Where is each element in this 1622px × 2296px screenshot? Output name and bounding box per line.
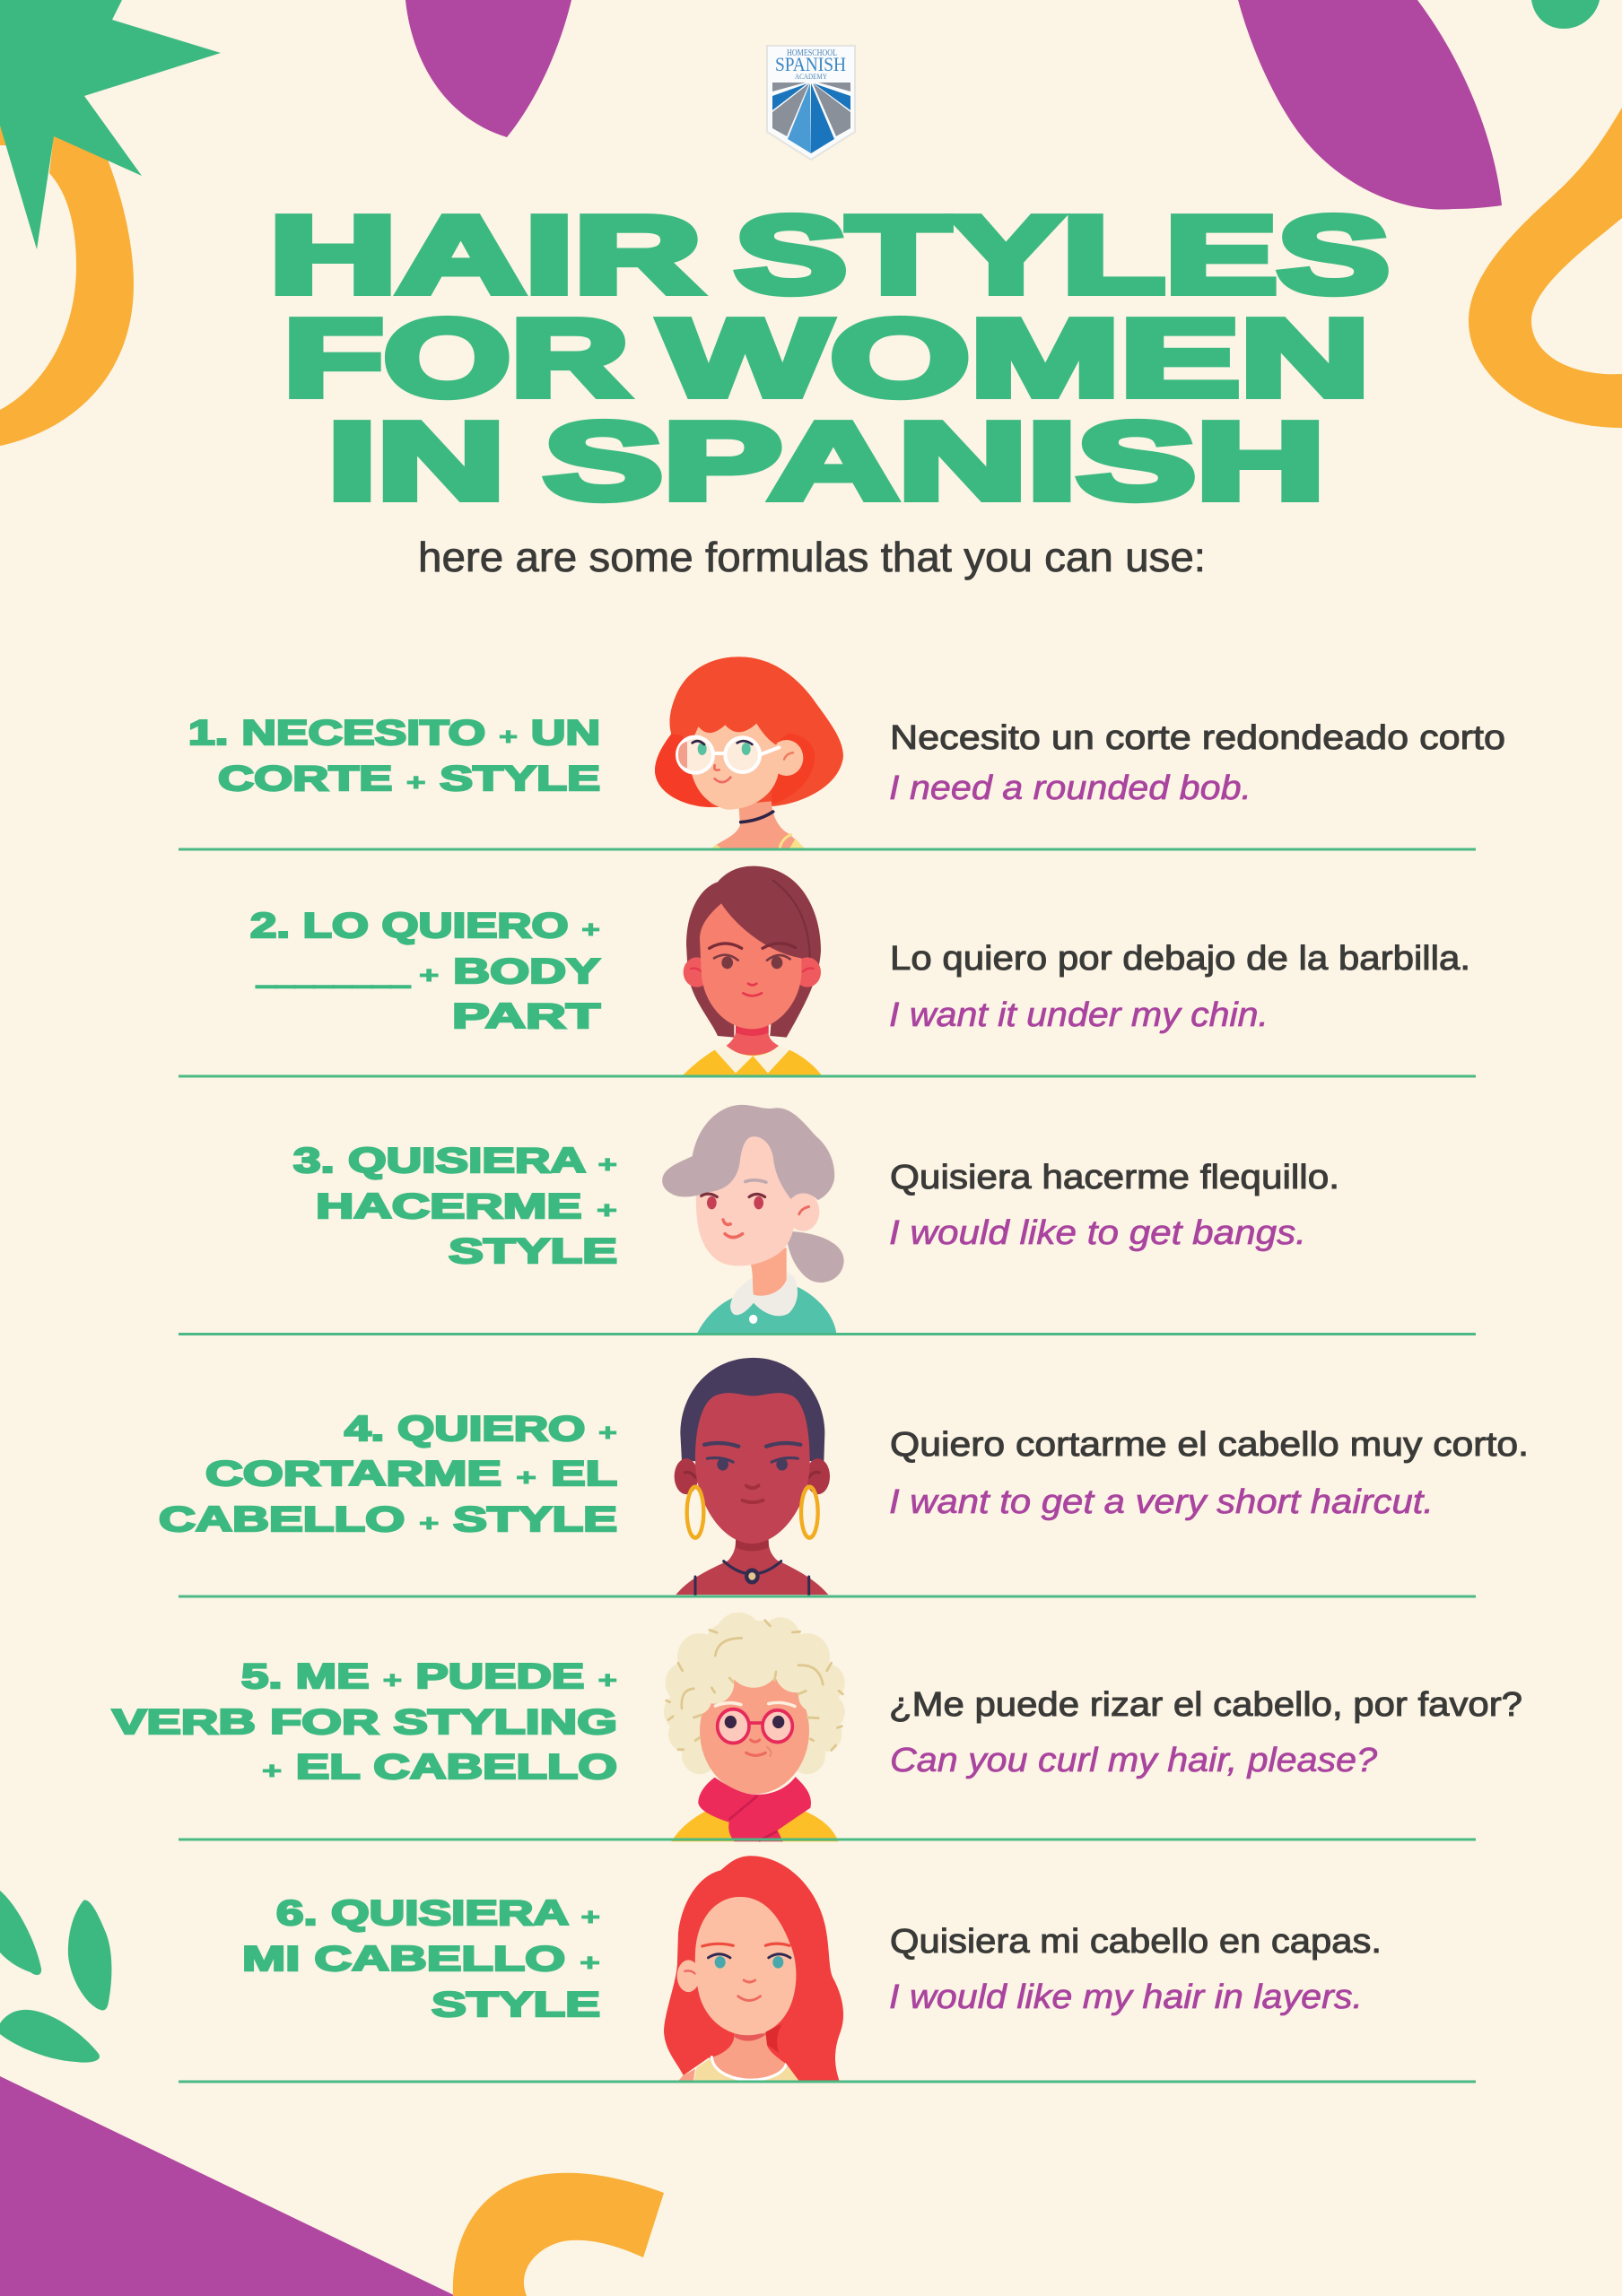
row 2 Spanish sentence and translation: I want it under my chin. — [889, 996, 1269, 1034]
row 3 Spanish sentence and translation — [889, 1159, 1339, 1252]
row 5 Spanish sentence and translation: ¿Me puede rizar el cabello, por favor? — [889, 1686, 1522, 1724]
row 1 Spanish sentence and translation: I need a rounded bob. — [889, 770, 1251, 807]
row 3 portrait: grey hair with low bun — [662, 1105, 844, 1334]
title: IN — [327, 400, 505, 522]
decor: purple leaf top centre — [406, 0, 571, 137]
logo: Homeschool Spanish Academy shield: ACADEMY — [795, 73, 827, 81]
row 3 Spanish sentence and translation: I would like to get bangs. — [889, 1214, 1306, 1252]
row 5 formula: 5. ME + PUEDE + — [241, 1657, 617, 1696]
row 2 Spanish sentence and translation: Lo quiero por debajo de la barbilla. — [890, 940, 1470, 978]
row 6 Spanish sentence and translation: Quisiera mi cabello en capas. — [890, 1923, 1382, 1961]
row 3 formula: 3. QUISIERA + — [293, 1142, 617, 1180]
title: WOMEN — [660, 297, 1370, 419]
row 4 formula: CORTARME + EL — [205, 1455, 617, 1493]
row 6 formula: 6. QUISIERA + — [276, 1894, 600, 1933]
row 5 portrait: curly blonde hair, red glasses and scarf — [664, 1613, 845, 1841]
decor: orange ring top left — [0, 126, 134, 446]
row 2 Spanish sentence and translation — [889, 940, 1470, 1034]
row 2 formula: 2. LO QUIERO + — [250, 907, 600, 945]
row 3 Spanish sentence and translation: Quisiera hacerme flequillo. — [890, 1159, 1339, 1196]
row 2 formula: + BODY — [419, 952, 600, 991]
decor: purple triangle bottom left — [0, 2076, 456, 2296]
logo: Homeschool Spanish Academy shield — [767, 46, 855, 160]
row 3 formula: STYLE — [449, 1232, 617, 1271]
row 1 formula: CORTE + STYLE — [218, 760, 600, 798]
row 4 formula — [159, 1410, 617, 1539]
row 1 Spanish sentence and translation — [889, 719, 1505, 807]
row 5 formula: + EL CABELLO — [262, 1748, 617, 1787]
row 4 Spanish sentence and translation: I want to get a very short haircut. — [889, 1483, 1434, 1521]
row 6 Spanish sentence and translation: I would like my hair in layers. — [889, 1979, 1363, 2016]
title — [269, 194, 1390, 522]
row 6 Spanish sentence and translation — [889, 1923, 1382, 2016]
row 6 formula: STYLE — [432, 1986, 600, 2024]
row 4 formula: 4. QUIERO + — [344, 1410, 617, 1448]
row 4 portrait: short dark hair with hoop earrings — [675, 1358, 830, 1595]
row 4 Spanish sentence and translation — [889, 1426, 1529, 1521]
decor: purple leaf top right — [1238, 0, 1502, 209]
row 5 formula: VERB FOR STYLING — [112, 1703, 617, 1742]
row 1 formula: 1. NECESITO + UN — [188, 714, 600, 752]
decor: green star top left — [0, 0, 221, 249]
decor: orange arc bottom — [453, 2173, 664, 2296]
row 2 formula: PART — [452, 997, 601, 1036]
row 5 formula — [112, 1657, 617, 1787]
row 1 formula — [188, 714, 600, 798]
row 2 formula — [250, 907, 601, 1036]
row 3 formula: HACERME + — [316, 1187, 617, 1226]
row 6 portrait: long wavy red hair — [664, 1856, 843, 2082]
subtitle: here are some formulas that you can use: — [418, 534, 1206, 580]
decor: green leaves bottom left — [0, 1891, 111, 2063]
row 2 portrait: auburn side-swept hair — [682, 866, 823, 1076]
row 1 Spanish sentence and translation: Necesito un corte redondeado corto — [890, 719, 1505, 757]
title: SPANISH — [544, 400, 1325, 522]
logo: Homeschool Spanish Academy shield: HOMESCHOOL — [787, 48, 837, 58]
row 5 Spanish sentence and translation: Can you curl my hair, please? — [890, 1742, 1378, 1779]
row 6 formula — [242, 1894, 600, 2024]
row 4 Spanish sentence and translation: Quiero cortarme el cabello muy corto. — [890, 1426, 1529, 1464]
title: FOR — [283, 297, 629, 419]
row 2 formula: ________ — [256, 952, 411, 991]
logo: Homeschool Spanish Academy shield: SPANISH — [775, 53, 846, 75]
row 6 formula: MI CABELLO + — [242, 1940, 600, 1979]
row 4 formula: CABELLO + STYLE — [159, 1500, 617, 1539]
row 1 portrait: red bob with round glasses — [655, 657, 843, 848]
row 5 Spanish sentence and translation — [889, 1686, 1522, 1779]
title: HAIR — [269, 194, 702, 316]
row 3 formula — [293, 1142, 617, 1271]
decor: orange squiggle right — [1469, 108, 1622, 428]
title: STYLES — [735, 194, 1390, 316]
decor: green drop top right — [1531, 0, 1600, 29]
